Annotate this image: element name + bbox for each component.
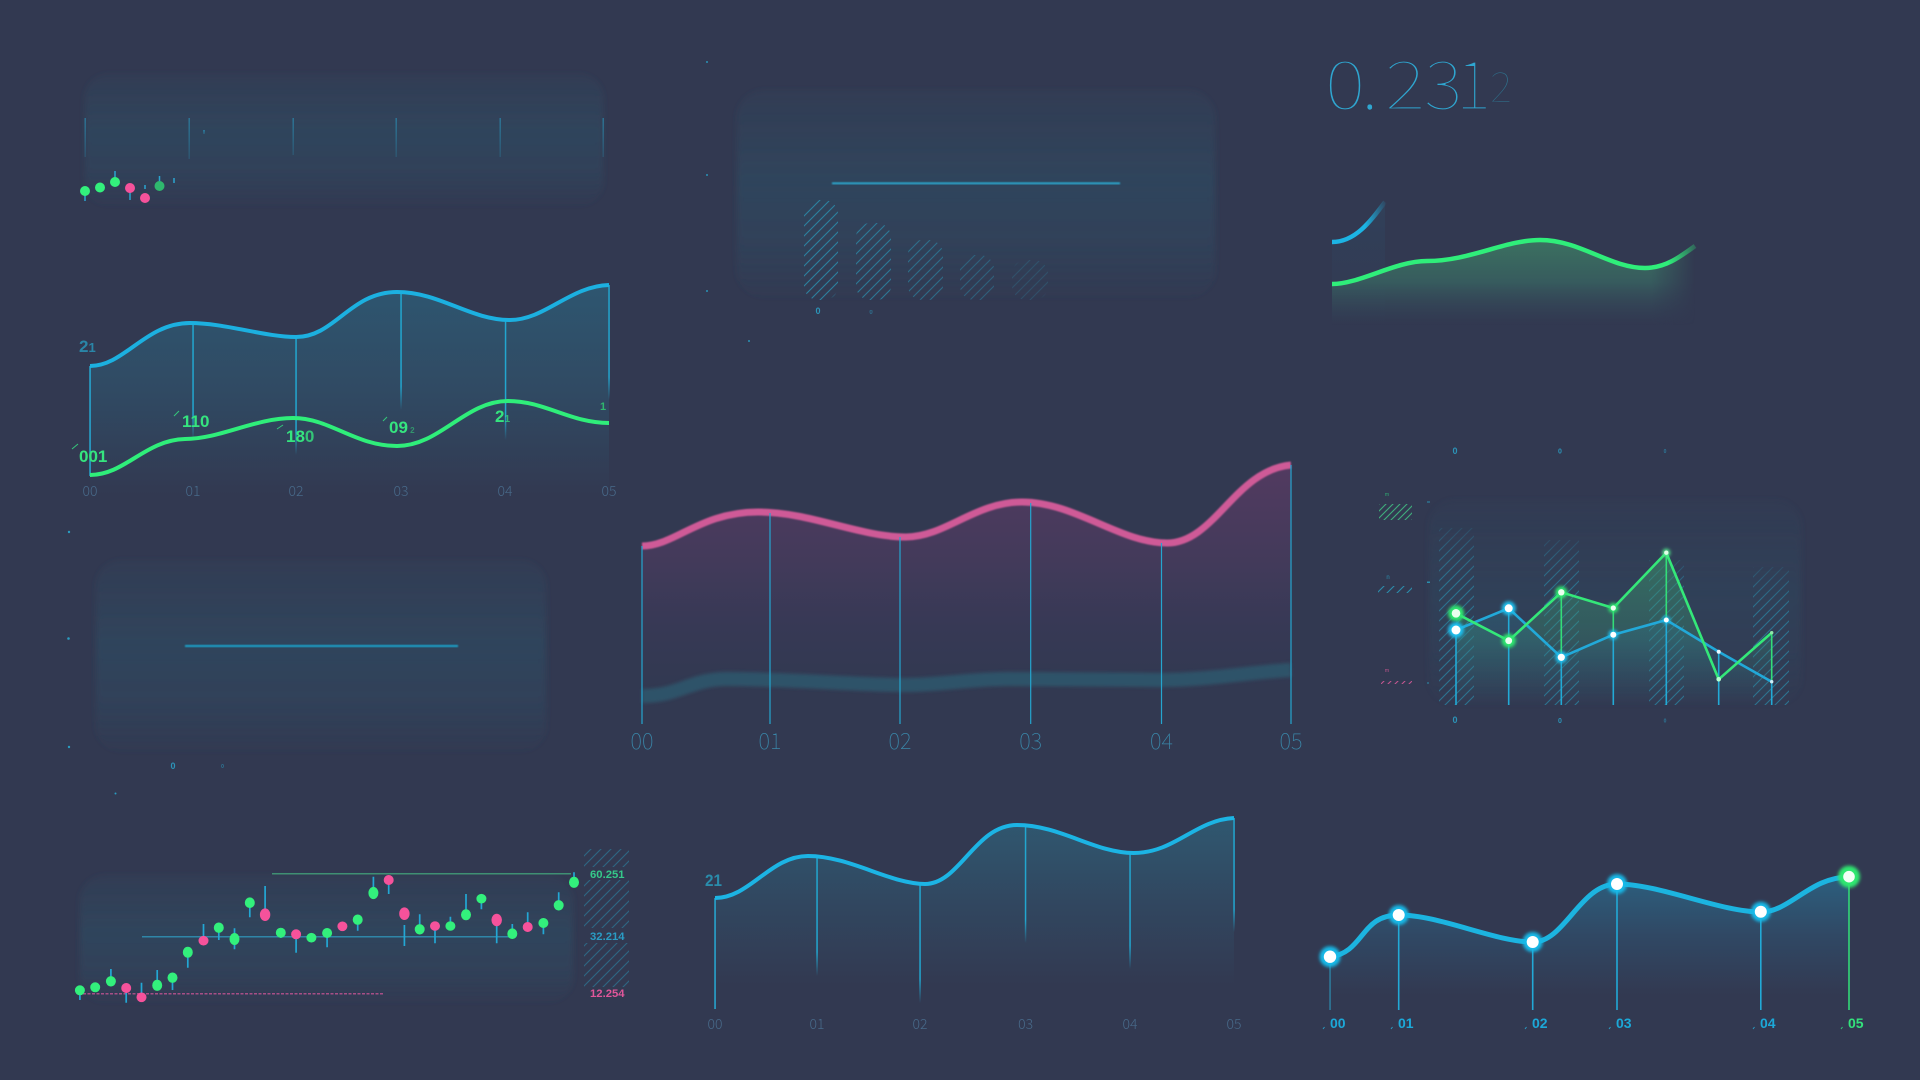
vertical guide lines [89, 285, 610, 476]
panel background [96, 560, 546, 752]
x axis labels: 05 [1848, 1015, 1864, 1031]
chart: bottom-center area chart [705, 818, 1241, 1034]
x axis labels: 01 [1398, 1015, 1414, 1031]
small candlesticks [80, 171, 174, 203]
headline number [1325, 31, 1512, 129]
blue area [1330, 877, 1849, 1010]
teal blurred band [642, 670, 1291, 696]
digit 1: 1 [1456, 32, 1491, 129]
green area [1332, 242, 1687, 308]
x axis labels: 04 [1760, 1015, 1776, 1031]
pink line [642, 465, 1291, 546]
value labels: 180 [286, 427, 314, 446]
green verticals [1561, 553, 1772, 682]
panel background [80, 875, 573, 1003]
blue fragment area [1332, 202, 1385, 325]
x axis labels: 03 [1018, 1014, 1033, 1034]
blue verticals [1456, 608, 1772, 705]
level value labels [590, 869, 625, 1000]
green vertical [1848, 877, 1850, 1010]
value label: 21 [705, 871, 722, 890]
top axis labels [1452, 446, 1667, 456]
blue area [90, 285, 609, 497]
x axis labels: 00 [631, 724, 653, 756]
blue line [715, 818, 1234, 898]
chart: top-right green area [1332, 200, 1696, 308]
x axis labels [1323, 1015, 1864, 1031]
tick marks [84, 118, 604, 159]
panel background [85, 74, 603, 206]
green line [1332, 240, 1695, 284]
bottom axis labels: 0 [1558, 718, 1562, 725]
hatched columns [1439, 528, 1789, 705]
panel background [737, 90, 1215, 298]
vertical guide lines [714, 818, 1235, 1009]
bottom axis labels [1452, 715, 1667, 725]
chart: two line area chart [72, 285, 616, 501]
level value labels: 60.251 [590, 869, 625, 881]
chart: candlestick [75, 849, 629, 1003]
digit 3: 3 [1424, 32, 1462, 129]
small labels: 0 [170, 761, 176, 771]
x axis labels [83, 481, 616, 501]
x axis labels: 04 [1150, 724, 1173, 756]
value labels: 21 [495, 407, 510, 426]
x axis labels: 00 [708, 1014, 722, 1034]
green line [90, 401, 609, 475]
value labels: 1 [600, 401, 606, 413]
horizontal line [832, 182, 1120, 184]
x axis labels: 01 [810, 1014, 824, 1034]
green line [1456, 553, 1772, 679]
legend [1378, 492, 1430, 684]
x axis labels: 03 [394, 481, 408, 501]
pink area [642, 465, 1291, 700]
blue line [1456, 608, 1772, 682]
top axis labels: 0 [1452, 446, 1458, 456]
vertical guide lines [642, 465, 1291, 724]
blue line [90, 285, 609, 366]
x axis labels: 02 [889, 724, 911, 756]
small labels: 0 [221, 764, 224, 770]
x axis labels: 00 [83, 481, 97, 501]
value labels: 21 [79, 337, 96, 356]
decimal point: . [1362, 32, 1377, 129]
top axis labels: 0 [1558, 448, 1562, 456]
small markers [706, 61, 750, 342]
small labels: 0 [815, 306, 821, 316]
chart: central pink area chart [631, 465, 1302, 756]
value labels: 110 [182, 412, 209, 431]
green candles [75, 877, 579, 995]
data nodes [1320, 866, 1860, 967]
x axis labels: 00 [1330, 1015, 1346, 1031]
legend: m [1385, 492, 1389, 498]
bottom axis labels: 0 [1664, 718, 1667, 724]
bottom axis labels: 0 [1452, 715, 1458, 725]
blue line [1330, 877, 1849, 957]
value labels [72, 337, 606, 466]
x axis labels: 04 [498, 481, 513, 501]
blue area [1456, 608, 1772, 705]
x axis labels [708, 1014, 1241, 1034]
x axis labels [631, 724, 1302, 756]
blue fragment line [1332, 202, 1385, 242]
small markers [67, 531, 116, 794]
first faded vertical [1329, 957, 1331, 1010]
x axis labels: 05 [602, 481, 616, 501]
chart: bottom-right node line [1320, 866, 1864, 1031]
x axis labels: 05 [1227, 1014, 1241, 1034]
small labels [815, 306, 873, 316]
x axis labels: 03 [1616, 1015, 1632, 1031]
wicks [80, 872, 574, 1003]
digit 2: 2 [1385, 31, 1425, 128]
legend: n [1386, 575, 1390, 581]
x axis labels: 01 [759, 724, 781, 756]
value labels: 09 2 [389, 418, 415, 437]
chart: right multi-line chart [1378, 446, 1801, 725]
level value labels: 12.254 [590, 988, 625, 1000]
small labels [170, 761, 224, 771]
legend: m [1385, 668, 1389, 674]
small labels: 0 [869, 310, 873, 316]
x axis labels: 02 [289, 481, 303, 501]
level lines [83, 873, 571, 994]
x axis labels: 03 [1019, 724, 1042, 756]
vertical lines [1399, 884, 1761, 1010]
blue area [715, 818, 1234, 1000]
top axis labels: 0 [1664, 449, 1667, 455]
x axis labels: 02 [913, 1014, 927, 1034]
digit 0: 0 [1325, 31, 1365, 128]
value labels: 001 [79, 447, 107, 466]
x axis labels: 01 [186, 481, 200, 501]
horizontal line [185, 645, 458, 647]
pink candles [122, 875, 532, 1002]
data points [1448, 549, 1773, 683]
panel background [1429, 500, 1801, 705]
hatched side column [584, 849, 629, 987]
level value labels: 32.214 [590, 931, 625, 943]
x axis labels: 02 [1532, 1015, 1548, 1031]
faded digit: 2 [1490, 54, 1512, 115]
green area [1456, 553, 1772, 705]
hatched bars [804, 200, 1048, 300]
panel: middle-left line [67, 531, 546, 794]
panel: top-center bars [706, 61, 1215, 342]
x axis labels: 04 [1123, 1014, 1138, 1034]
panel: top-left blurred ticks and candles [80, 74, 604, 206]
x axis labels: 05 [1280, 724, 1302, 756]
